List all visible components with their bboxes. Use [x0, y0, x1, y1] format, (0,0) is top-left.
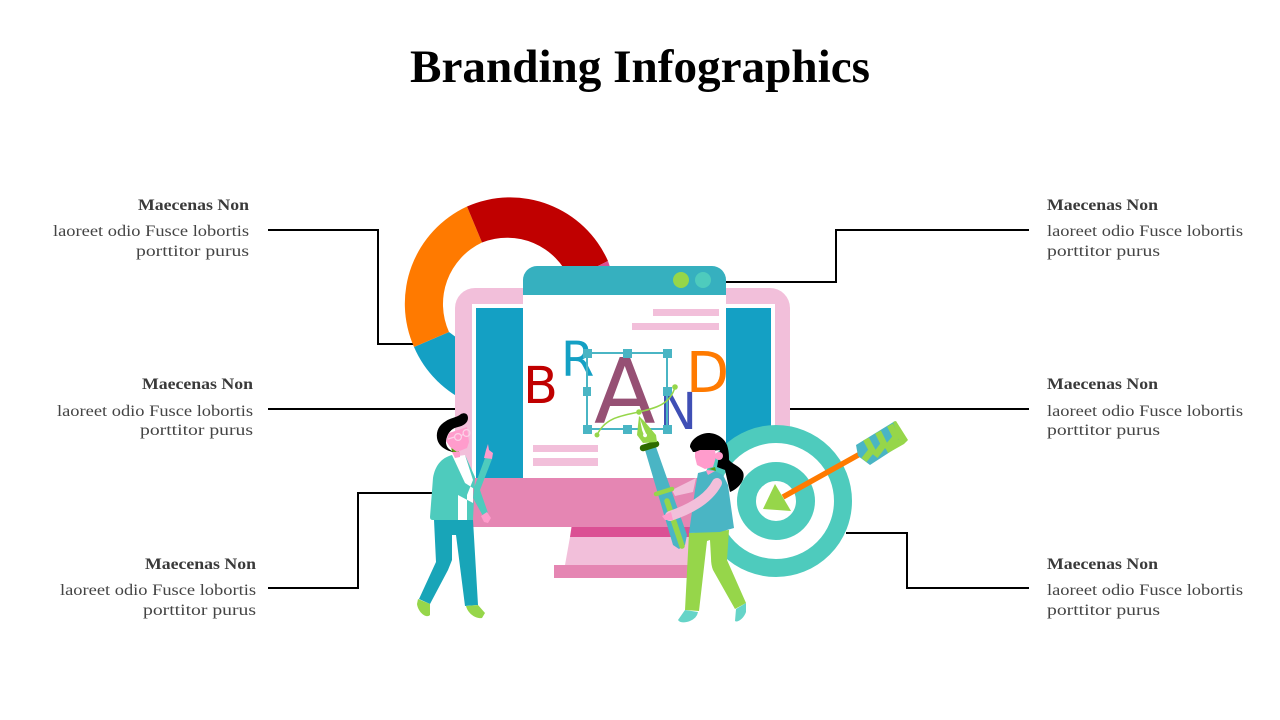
woman front arm — [670, 483, 717, 516]
monitor neck — [570, 527, 690, 537]
monitor — [455, 288, 790, 578]
man hands — [481, 444, 493, 523]
man neck — [452, 452, 460, 458]
text block: top left — [53, 197, 249, 260]
text block: top right — [1047, 197, 1243, 260]
text block: middle left — [57, 376, 253, 439]
man hair — [437, 413, 468, 452]
connector: bottom left — [268, 493, 432, 588]
man arms — [473, 458, 492, 516]
brand lettering: N — [659, 383, 697, 442]
man face — [446, 427, 469, 452]
text block: middle left: porttitor purus — [140, 422, 253, 439]
woman pants — [685, 530, 746, 611]
back arm — [672, 478, 696, 496]
pen body — [645, 447, 687, 549]
man figure — [417, 413, 493, 618]
connector: top right — [726, 230, 1029, 282]
text block: top right: Maecenas Non — [1047, 197, 1158, 214]
woman figure — [637, 416, 746, 622]
bullseye — [709, 434, 843, 568]
connector: top left — [268, 230, 416, 344]
text lines bottom — [533, 445, 598, 466]
text lines top — [632, 309, 719, 330]
target with arrow — [709, 421, 908, 568]
man glasses — [448, 430, 470, 440]
connector: bottom right — [846, 533, 1029, 588]
brand lettering — [523, 332, 729, 445]
brand lettering: A — [594, 340, 656, 445]
woman shirt — [689, 471, 734, 533]
text block: bottom right: laoreet odio Fusce lobortis — [1047, 582, 1243, 599]
arrow head — [763, 484, 791, 511]
text block: bottom left: laoreet odio Fusce lobortis — [60, 582, 256, 599]
text block: bottom right: Maecenas Non — [1047, 556, 1158, 573]
arrow shaft — [783, 454, 860, 497]
pen band — [656, 489, 672, 494]
man shoes — [417, 599, 485, 618]
text block: middle right: Maecenas Non — [1047, 376, 1158, 393]
man shirt — [452, 455, 473, 520]
text block: bottom right: porttitor purus — [1047, 602, 1160, 619]
window dot teal — [695, 272, 711, 288]
woman hair — [690, 433, 744, 492]
text block: middle right — [1047, 376, 1243, 439]
text block: bottom left: Maecenas Non — [145, 556, 256, 573]
man trousers — [419, 520, 478, 606]
text block: middle left: laoreet odio Fusce lobortis — [57, 403, 253, 420]
pen collar — [643, 444, 656, 448]
text block: bottom left — [60, 556, 256, 619]
monitor screen — [476, 308, 771, 483]
donut chart — [405, 197, 610, 403]
arrow fletching — [856, 421, 908, 465]
monitor chin — [472, 478, 790, 527]
pen — [637, 416, 687, 549]
woman hand — [662, 512, 673, 520]
title: Branding Infographics — [410, 41, 870, 93]
pen clip — [667, 501, 682, 546]
brand lettering: B — [523, 357, 558, 416]
man jacket — [430, 455, 476, 520]
text block: top left: Maecenas Non — [138, 197, 249, 214]
text block: bottom right — [1047, 556, 1243, 619]
woman neck — [706, 470, 715, 475]
brand lettering: D — [686, 341, 729, 406]
pen nib — [637, 416, 657, 443]
window dot green — [673, 272, 689, 288]
text block: top right: laoreet odio Fusce lobortis — [1047, 223, 1243, 240]
text block: middle right: laoreet odio Fusce lobortis — [1047, 403, 1243, 420]
connector: middle right — [790, 408, 1029, 410]
woman face — [695, 450, 716, 469]
text block: top left: laoreet odio Fusce lobortis — [53, 223, 249, 240]
woman shoes — [678, 603, 746, 622]
text block: top right: porttitor purus — [1047, 243, 1160, 260]
monitor foot — [554, 565, 694, 578]
text block: middle right: porttitor purus — [1047, 422, 1160, 439]
text block: bottom left: porttitor purus — [143, 602, 256, 619]
text block: top left: porttitor purus — [136, 243, 249, 260]
selection box — [583, 349, 678, 438]
window title bar — [523, 266, 726, 295]
brand lettering: R — [561, 332, 594, 388]
browser window — [523, 266, 726, 478]
monitor frame — [455, 288, 790, 527]
text block: middle left: Maecenas Non — [142, 376, 253, 393]
connector: middle left — [268, 408, 456, 410]
